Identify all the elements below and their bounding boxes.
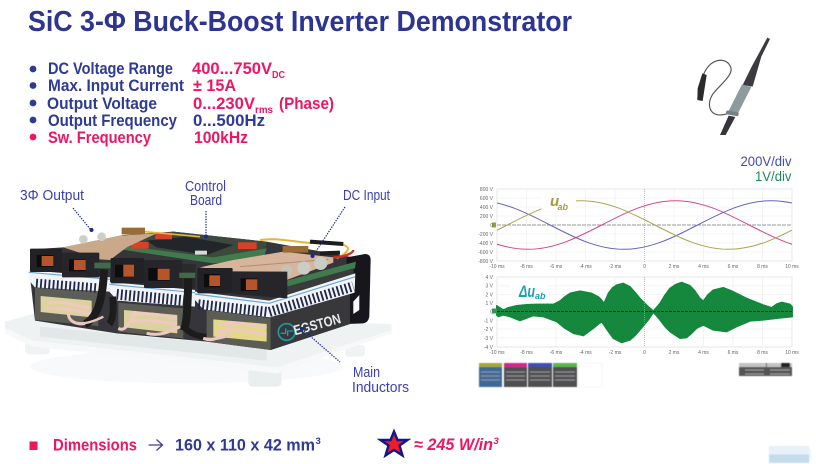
chart: differential voltage ripple: 0	[490, 310, 493, 316]
chart: differential voltage ripple: 4 ms	[698, 350, 709, 356]
scale legend: 1V/div	[755, 168, 792, 184]
specification list: 0...500Hz	[193, 111, 265, 130]
chart: differential voltage ripple: 1 V	[485, 301, 494, 307]
specification list: (Phase)	[279, 94, 334, 113]
icon: oscilloscope probe	[697, 38, 770, 135]
chart: differential voltage ripple: -10 ms	[489, 350, 505, 356]
specification list	[30, 59, 334, 147]
chart: output voltages: 6 ms	[728, 264, 739, 270]
dimensions line: 160 x 110 x 42 mm	[175, 436, 315, 454]
chart: output voltages: 200 V	[480, 214, 494, 220]
chart: output voltages: -8 ms	[520, 264, 533, 270]
specification list: Sw. Frequency	[48, 128, 151, 147]
callout: 3Φ Output	[20, 187, 94, 232]
power density: ≈ 245 W/in	[414, 435, 493, 454]
chart: differential voltage ripple: 6 ms	[728, 350, 739, 356]
blurred watermark	[769, 446, 812, 463]
dimensions line: 3	[316, 436, 321, 447]
icon: star	[380, 432, 408, 456]
chart: differential voltage ripple: -8 ms	[520, 350, 533, 356]
control board	[120, 228, 267, 263]
specification list: 400...750V	[192, 59, 273, 78]
chart: output voltages: -6 ms	[550, 264, 563, 270]
chart: differential voltage ripple: Δu	[518, 282, 535, 301]
chart: differential voltage ripple: 10 ms	[785, 350, 799, 356]
specification list: ± 15A	[193, 76, 236, 95]
chart: output voltages: 400 V	[480, 205, 494, 211]
callout: Main Inductors: Inductors	[352, 379, 409, 396]
chart: output voltages: 2 ms	[669, 264, 680, 270]
chart: output voltages: -400 V	[478, 241, 494, 247]
chart: differential voltage ripple: 2 ms	[669, 350, 680, 356]
callout: DC Input: DC Input	[343, 187, 391, 204]
chart: output voltages: 0	[490, 223, 493, 229]
dimensions line	[30, 436, 321, 454]
chart: differential voltage ripple: -6 ms	[550, 350, 563, 356]
chart: differential voltage ripple: 2 V	[485, 292, 494, 298]
chart: differential voltage ripple: -1 V	[484, 318, 494, 324]
callout: Control Board: Board	[190, 192, 222, 209]
chart: output voltages: 10 ms	[785, 264, 799, 270]
scale legend: 200V/div	[740, 153, 792, 169]
right module: EGSTON	[292, 310, 342, 338]
power density: 3	[494, 436, 500, 447]
right module	[195, 239, 356, 350]
chart: differential voltage ripple: -3 V	[484, 336, 494, 342]
specification list: rms	[255, 105, 273, 116]
chart: output voltages	[478, 187, 799, 268]
chart: output voltages: -10 ms	[489, 264, 505, 270]
chart: output voltages: 0	[643, 264, 646, 270]
chart: output voltages: -800 V	[478, 259, 494, 265]
chart: output voltages: -200 V	[478, 232, 494, 238]
callout: Control Board: Control	[185, 178, 226, 195]
left module	[29, 232, 157, 326]
callout: DC Input	[310, 187, 391, 258]
chart: output voltages: -600 V	[478, 250, 494, 256]
right side support	[347, 254, 371, 324]
chart: differential voltage ripple: 8 ms	[757, 350, 768, 356]
specification list: Output Voltage	[47, 94, 157, 113]
specification list: Output Frequency	[48, 111, 177, 130]
chart: output voltages: 800 V	[480, 187, 494, 193]
callout: Main Inductors	[300, 327, 409, 396]
chart: differential voltage ripple	[484, 275, 799, 356]
chart: differential voltage ripple: -2 V	[484, 327, 494, 333]
chart: differential voltage ripple: -4 ms	[579, 350, 592, 356]
callout: 3Φ Output: 3Φ Output	[20, 187, 85, 204]
chart: differential voltage ripple: 3 V	[485, 284, 494, 290]
specification list: 0...230V	[193, 94, 256, 113]
chart: differential voltage ripple: 4 V	[485, 275, 494, 281]
chart: output voltages: ab	[558, 202, 569, 212]
chart: differential voltage ripple: -4 V	[484, 345, 494, 351]
chart: differential voltage ripple: ab	[535, 291, 546, 301]
oscilloscope channel readouts	[479, 363, 602, 387]
dark backing silhouette	[30, 232, 354, 350]
acrylic base plate	[5, 314, 392, 387]
specification list: DC	[272, 70, 285, 81]
chart: output voltages: -2 ms	[609, 264, 622, 270]
chart: output voltages: 4 ms	[698, 264, 709, 270]
chart: differential voltage ripple: -2 ms	[609, 350, 622, 356]
scale legend	[740, 153, 792, 184]
chart: output voltages: 8 ms	[757, 264, 768, 270]
specification list: Max. Input Current	[48, 76, 184, 95]
chart: output voltages: -4 ms	[579, 264, 592, 270]
chart: differential voltage ripple: 0	[643, 350, 646, 356]
chart: output voltages: u	[550, 193, 559, 210]
callout: Main Inductors: Main	[353, 364, 380, 381]
product photo: inverter hardware	[5, 228, 392, 387]
dimensions line: Dimensions	[53, 436, 137, 454]
specification list: DC Voltage Range	[48, 59, 173, 78]
specification list: 100kHz	[194, 128, 248, 147]
callout: Control Board	[185, 178, 226, 238]
chart: output voltages: 600 V	[480, 196, 494, 202]
oscilloscope timebase readout	[739, 363, 792, 376]
title: SiC 3-Φ Buck-Boost Inverter Demonstrator	[28, 6, 572, 38]
middle module	[109, 258, 207, 338]
